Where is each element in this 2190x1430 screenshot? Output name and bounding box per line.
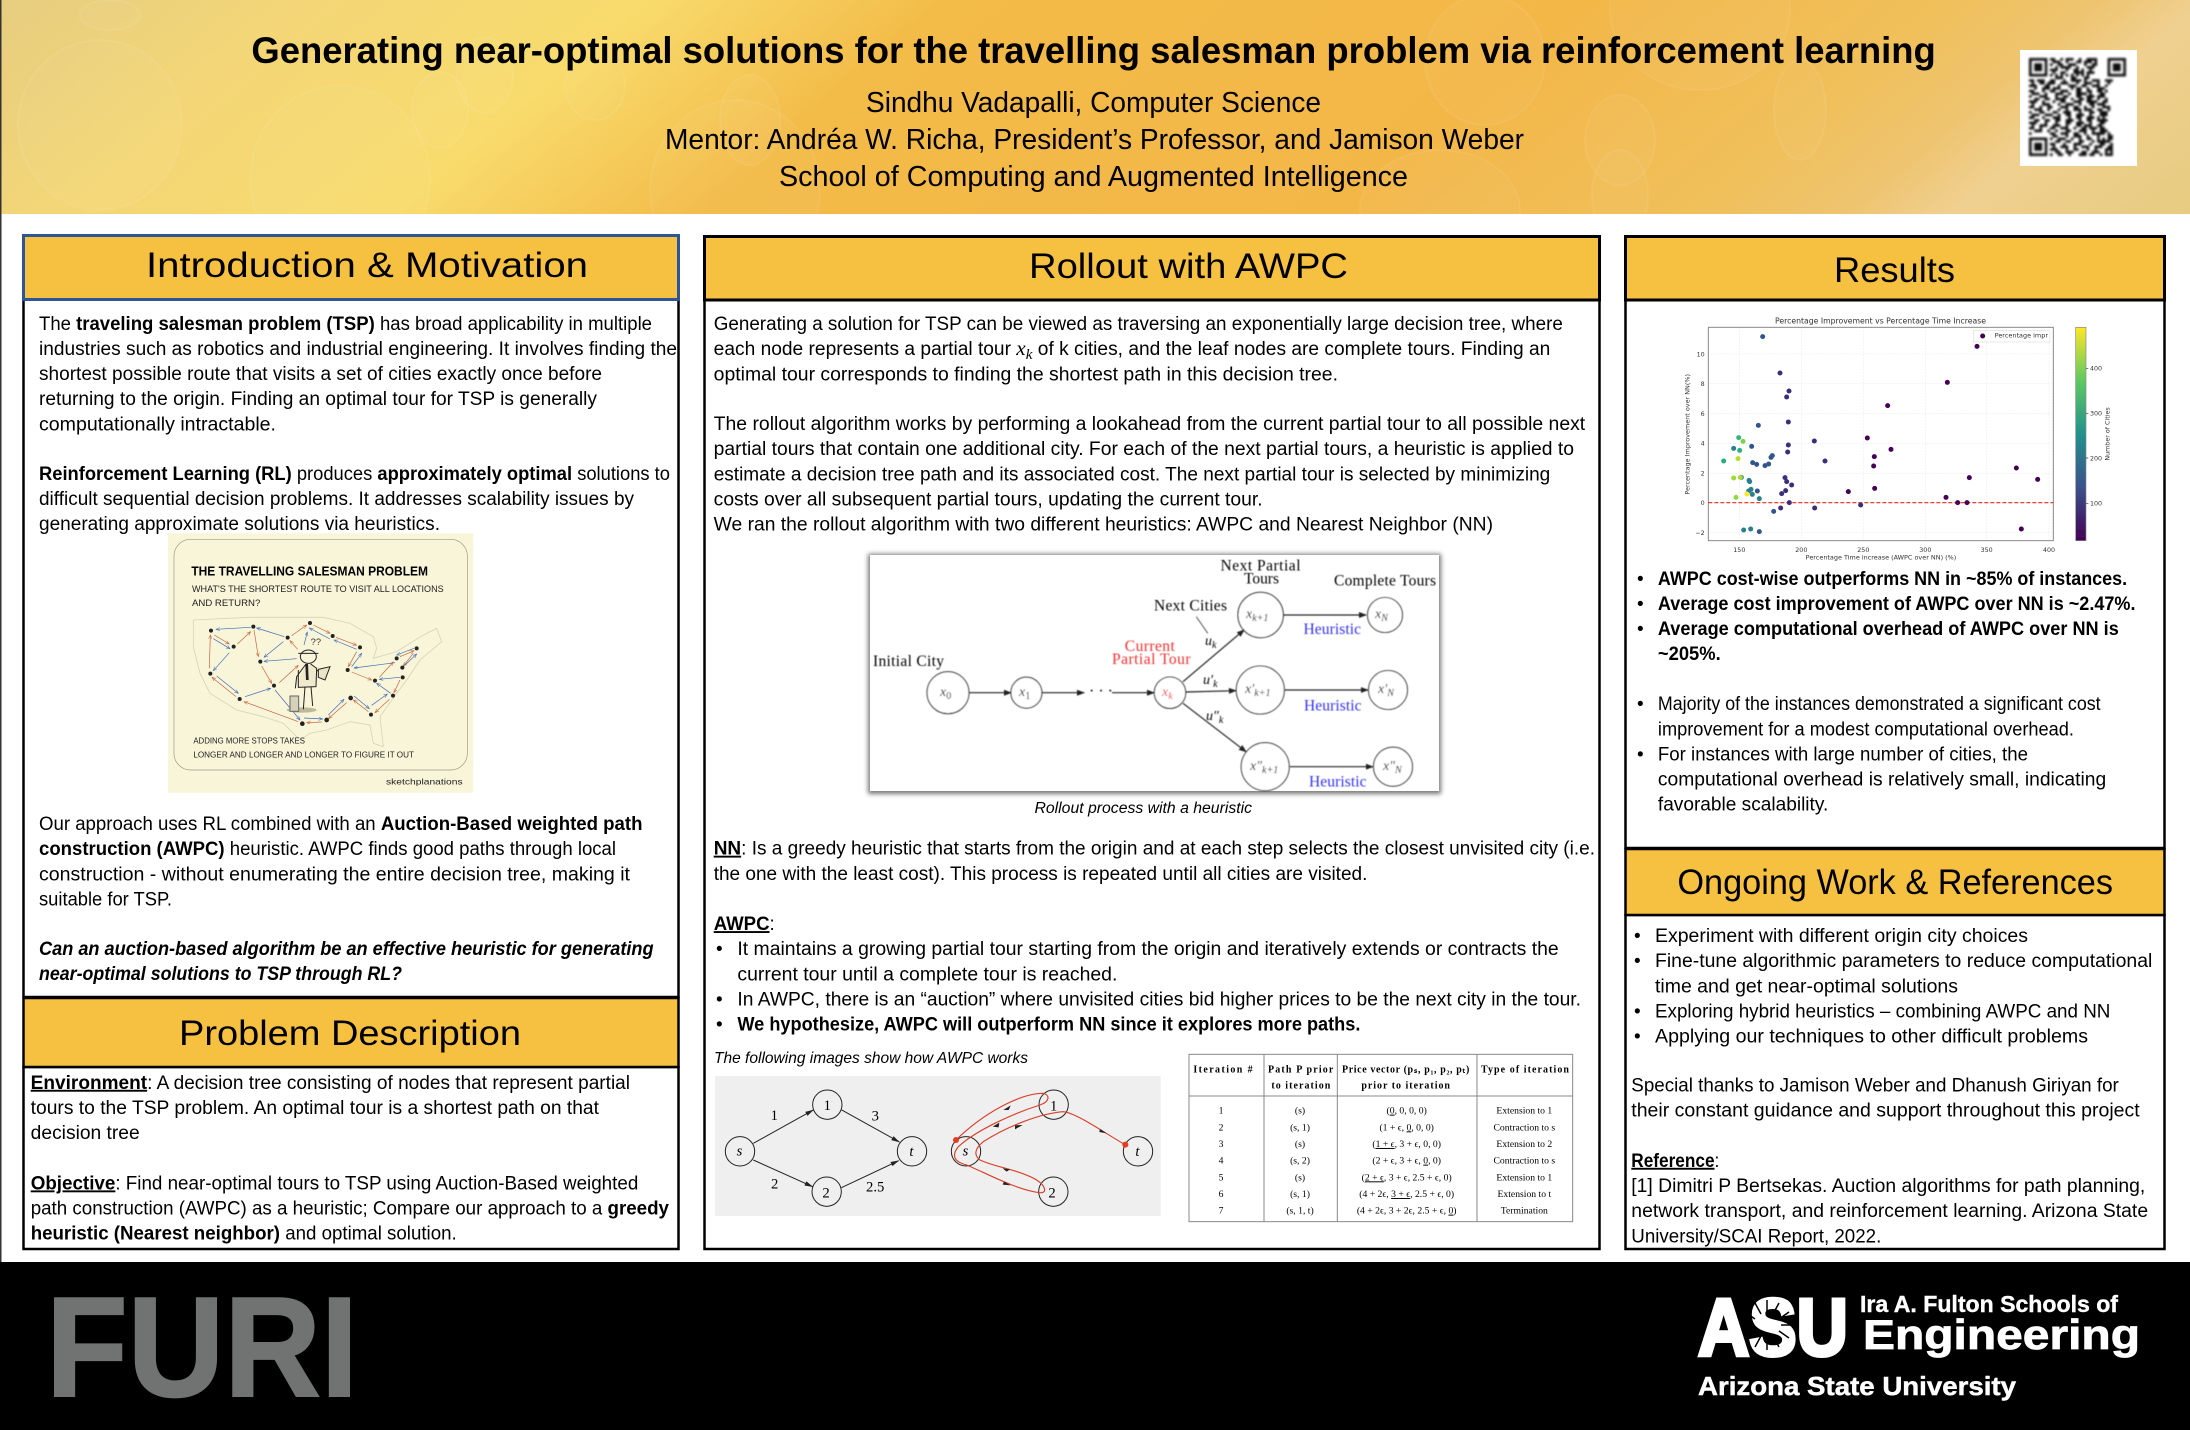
panel: ongoing work and references: [1626, 849, 2164, 1249]
text block: key results: •: [1637, 619, 1644, 640]
diagram: rollout process: x: [1375, 607, 1381, 622]
table: AWPC iterations: 4: [1219, 1156, 1224, 1167]
text block: ongoing work list: time and get near-optimal solutions: [1655, 976, 1958, 997]
text block: AWPC description: •: [716, 990, 723, 1010]
logo: ASU Fulton Engineering: Arizona State University: [1698, 1371, 2017, 1401]
logo: ASU Fulton Engineering: Engineering: [1863, 1311, 2140, 1358]
footer bar: [0, 1262, 2190, 1430]
text block: AWPC description: AWPC:: [714, 914, 775, 935]
diagram: AWPC graph example: 2.5: [866, 1180, 884, 1196]
table: AWPC iterations: 3: [1219, 1139, 1224, 1150]
scatter chart: percentage improvement vs time increase: 400: [2090, 366, 2102, 373]
text block: research question: near-optimal solutions to TSP through RL?: [39, 964, 402, 985]
diagram: rollout process: x″: [1250, 759, 1262, 774]
school: School of Computing and Augmented Intelligence: [779, 161, 1408, 193]
table: AWPC iterations: Type of iteration: [1481, 1065, 1569, 1076]
heading: Rollout with AWPC: Rollout with AWPC: [1029, 247, 1348, 286]
text block: research question: [39, 939, 654, 985]
text block: acknowledgements: [1631, 1075, 2140, 1122]
table: AWPC iterations: (s, 2): [1290, 1156, 1310, 1167]
text block: our approach: suitable for TSP.: [39, 890, 172, 910]
text block: key results: AWPC cost-wise outperforms NN in ~85% of instances.: [1658, 569, 2127, 590]
text block: TSP introduction: industries such as robotics and industrial engineering. It involves finding the: [39, 339, 677, 360]
diagram: rollout process: Initial City: [873, 653, 944, 670]
table: AWPC iterations: (s, 1): [1290, 1189, 1310, 1200]
text block: TSP introduction: [39, 314, 677, 436]
diagram: rollout process: Partial Tour: [1112, 651, 1191, 668]
table: AWPC iterations: (1 + ϵ, 3 + ϵ, 0, 0): [1372, 1139, 1441, 1150]
text block: reinforcement learning: generating approximate solutions via heuristics.: [39, 514, 440, 535]
table: AWPC iterations: (2 + ϵ, 3 + ϵ, 0, 0): [1372, 1156, 1441, 1167]
text block: nearest neighbor: NN: Is a greedy heuristic that starts from the origin and at each step selects the closest unvisited city (i.e.: [714, 839, 1595, 860]
table: AWPC iterations: Termination: [1501, 1206, 1548, 1217]
table: AWPC iterations: (1 + ϵ, 0, 0, 0): [1379, 1122, 1434, 1133]
illustration: the travelling salesman problem sketch: AND RETURN?: [192, 598, 260, 608]
text block: objective: [31, 1173, 669, 1245]
diagram: AWPC graph example: 3: [872, 1109, 879, 1125]
text block: TSP introduction: returning to the origin. Finding an optimal tour for TSP is generally: [39, 389, 598, 410]
scatter chart: percentage improvement vs time increase: 4: [1701, 441, 1705, 448]
diagram: rollout process: x′: [1245, 682, 1254, 697]
text block: our approach: construction - without enumerating the entire decision tree, making it: [39, 864, 631, 885]
text block: rollout algorithm: partial tours that contain one additional city. For each of the next partial tours, a heuristic is applied to: [714, 439, 1574, 460]
logo: ASU Fulton Engineering: Ira A. Fulton Schools of: [1860, 1291, 2118, 1317]
scatter chart: percentage improvement vs time increase: Number of Cities: [2105, 407, 2112, 461]
heading: Introduction & Motivation: Introduction & Motivation: [146, 246, 588, 285]
text block: ongoing work list: Fine-tune algorithmic parameters to reduce computational: [1655, 951, 2152, 972]
heading: Ongoing Work & References: Ongoing Work & References: [1677, 863, 2113, 902]
text block: rollout algorithm: costs over all subsequent partial tours, updating the current tour.: [714, 490, 1263, 510]
diagram: rollout process: Next Partial: [1220, 558, 1300, 575]
table: AWPC iterations: Path P prior: [1268, 1065, 1334, 1076]
text block: AWPC description: •: [716, 1015, 723, 1036]
table: AWPC iterations: Contraction to s: [1493, 1122, 1555, 1133]
diagram: AWPC graph example: s: [963, 1143, 969, 1159]
text block: objective: heuristic (Nearest neighbor) and optimal solution.: [31, 1224, 457, 1245]
text block: reinforcement learning: Reinforcement Learning (RL) produces approximately optimal solutions to: [39, 464, 670, 485]
text block: our approach: [39, 814, 642, 910]
diagram: rollout process: k: [1219, 715, 1224, 726]
scatter chart: percentage improvement vs time increase: 200: [2090, 455, 2102, 462]
diagram: rollout process: k+1: [1252, 613, 1268, 624]
diagram: rollout process: x″: [1383, 759, 1395, 774]
scatter chart: percentage improvement vs time increase: 0: [1701, 500, 1705, 507]
table: AWPC iterations: (s): [1295, 1139, 1305, 1150]
scatter chart: percentage improvement vs time increase: [1684, 316, 2112, 562]
text block: objective: Objective: Find near-optimal tours to TSP using Auction-Based weighted: [31, 1173, 638, 1194]
table: AWPC iterations: (s, 1): [1290, 1122, 1310, 1133]
logo: ASU Fulton Engineering: [1698, 1283, 2140, 1401]
panel: results: [1626, 236, 2164, 848]
diagram: AWPC graph example: [715, 1076, 1161, 1216]
diagram: rollout process: x: [1162, 685, 1168, 700]
table: AWPC iterations: [1189, 1054, 1573, 1222]
scatter chart: percentage improvement vs time increase: 200: [1795, 547, 1807, 554]
scatter chart: percentage improvement vs time increase: Percentage Improvement over NN(%): [1684, 374, 1691, 495]
text block: reference: Reference:: [1631, 1151, 1719, 1172]
scatter chart: percentage improvement vs time increase: Percentage Time increase (AWPC over NN) (%): [1806, 555, 1956, 562]
diagram: rollout process: Tours: [1244, 570, 1279, 588]
table: AWPC iterations: Extension to 1: [1496, 1172, 1552, 1183]
icon: QR code: [2020, 50, 2137, 166]
text block: ongoing work list: [1634, 926, 2152, 1048]
text block: AWPC description: In AWPC, there is an “auction” where unvisited cities bid higher prices to be the next city in the tour.: [737, 990, 1581, 1010]
caption: AWPC images: The following images show how AWPC works: [714, 1050, 1028, 1067]
table: AWPC iterations: 6: [1219, 1189, 1224, 1200]
text block: ongoing work list: •: [1634, 1026, 1641, 1047]
panel: introduction and motivation: [24, 236, 678, 997]
text block: observations: computational overhead is relatively small, indicating: [1658, 770, 2106, 791]
text block: AWPC description: current tour until a complete tour is reached.: [737, 964, 1117, 985]
text block: reinforcement learning: difficult sequential decision problems. It addresses scalability issues by: [39, 489, 634, 510]
text block: ongoing work list: Experiment with different origin city choices: [1655, 926, 2028, 947]
diagram: AWPC graph example: 2: [822, 1185, 830, 1201]
table: AWPC iterations: Extension to 2: [1496, 1139, 1552, 1150]
table: AWPC iterations: to iteration: [1271, 1080, 1331, 1091]
table: AWPC iterations: Contraction to s: [1493, 1156, 1555, 1167]
text block: key results: Average cost improvement of AWPC over NN is ~2.47%.: [1658, 594, 2136, 615]
diagram: rollout process: N: [1394, 765, 1403, 776]
text block: key results: ~205%.: [1658, 644, 1721, 665]
diagram: rollout process: Complete Tours: [1334, 573, 1436, 590]
text block: reference: [1631, 1151, 2148, 1247]
text block: observations: Majority of the instances demonstrated a significant cost: [1658, 694, 2101, 715]
text block: decision tree: Generating a solution for TSP can be viewed as traversing an exponentially large decision tree, where: [714, 314, 1563, 335]
diagram: rollout process: · · ·: [1089, 683, 1113, 700]
scatter chart: percentage improvement vs time increase: 100: [2090, 501, 2102, 508]
text block: nearest neighbor: the one with the least cost). This process is repeated until all cities are visited.: [714, 864, 1367, 885]
table: AWPC iterations: (0, 0, 0, 0): [1387, 1106, 1427, 1117]
text block: ongoing work list: •: [1634, 926, 1641, 947]
diagram: rollout process: k: [1213, 679, 1218, 690]
text block: ongoing work list: Applying our techniques to other difficult problems: [1655, 1026, 2088, 1047]
text block: reference: University/SCAI Report, 2022.: [1631, 1226, 1881, 1247]
illustration: the travelling salesman problem sketch: WHAT'S THE SHORTEST ROUTE TO VISIT ALL LOCATIONS: [192, 584, 444, 594]
table: AWPC iterations: Iteration #: [1193, 1065, 1253, 1076]
scatter chart: percentage improvement vs time increase: 10: [1697, 351, 1705, 358]
text block: rollout algorithm: estimate a decision tree path and its associated cost. The next partial tour is selected by minimizing: [714, 464, 1550, 485]
text block: environment: decision tree: [31, 1123, 140, 1144]
table: AWPC iterations: Extension to t: [1498, 1189, 1551, 1200]
diagram: rollout process: Current: [1125, 638, 1175, 655]
scatter chart: percentage improvement vs time increase: 8: [1701, 381, 1705, 388]
text block: observations: •: [1637, 744, 1644, 765]
table: AWPC iterations: Extension to 1: [1496, 1106, 1552, 1117]
text block: rollout algorithm: [714, 414, 1586, 536]
illustration: the travelling salesman problem sketch: ADDING MORE STOPS TAKES: [193, 736, 305, 745]
table: AWPC iterations: (s): [1295, 1172, 1305, 1183]
illustration: the travelling salesman problem sketch: [168, 533, 473, 793]
text block: decision tree: [714, 314, 1563, 385]
text block: reference: network transport, and reinforcement learning. Arizona State: [1631, 1201, 2148, 1222]
scatter chart: percentage improvement vs time increase: 2: [1701, 471, 1705, 478]
scatter chart: percentage improvement vs time increase: 150: [1733, 547, 1745, 554]
table: AWPC iterations: (2 + ϵ, 3 + ϵ, 2.5 + ϵ, 0): [1362, 1172, 1452, 1183]
scatter chart: percentage improvement vs time increase: Percentage Improvement vs Percentage Time Increase: [1775, 316, 1986, 325]
table: AWPC iterations: 7: [1219, 1206, 1224, 1217]
text block: observations: [1637, 694, 2106, 816]
diagram: rollout process: k+1: [1262, 765, 1278, 776]
text block: decision tree: each node represents a partial tour x: [714, 336, 1026, 360]
diagram: rollout process: 0: [946, 691, 951, 702]
diagram: rollout process: x: [940, 685, 946, 700]
table: AWPC iterations: 2: [1219, 1122, 1224, 1133]
text block: environment: Environment: A decision tree consisting of nodes that represent partial: [31, 1073, 630, 1094]
diagram: AWPC graph example: 1: [824, 1098, 831, 1114]
diagram: AWPC graph example: s: [737, 1143, 743, 1159]
diagram: rollout process: N: [1386, 688, 1395, 699]
diagram: AWPC graph example: 1: [771, 1108, 778, 1124]
text block: decision tree: of k cities, and the leaf nodes are complete tours. Finding an: [1032, 339, 1550, 360]
text block: environment: [31, 1073, 630, 1144]
diagram: rollout process: u′: [1203, 673, 1213, 688]
author: Sindhu Vadapalli, Computer Science: [866, 87, 1321, 119]
text block: acknowledgements: their constant guidance and support throughout this project: [1631, 1101, 2140, 1122]
scatter chart: percentage improvement vs time increase: 6: [1701, 411, 1705, 418]
illustration: the travelling salesman problem sketch: LONGER AND LONGER AND LONGER TO FIGURE IT OUT: [193, 750, 414, 759]
illustration: the travelling salesman problem sketch: THE TRAVELLING SALESMAN PROBLEM: [191, 564, 428, 578]
text block: ongoing work list: •: [1634, 951, 1641, 972]
text block: objective: path construction (AWPC) as a heuristic; Compare our approach to a greedy: [31, 1198, 669, 1220]
diagram: rollout process: N: [1380, 613, 1389, 624]
text block: AWPC description: •: [716, 939, 723, 960]
table: AWPC iterations: 5: [1219, 1172, 1224, 1183]
diagram: rollout process: u″: [1206, 709, 1219, 724]
diagram: rollout process: k: [1212, 640, 1217, 651]
diagram: AWPC graph example: 2: [1048, 1185, 1056, 1201]
logo: FURI: FURI: [46, 1268, 358, 1427]
text block: our approach: construction (AWPC) heuristic. AWPC finds good paths through local: [39, 839, 616, 860]
text block: AWPC description: [714, 914, 1581, 1036]
table: AWPC iterations: (4 + 2ϵ, 3 + 2ϵ, 2.5 + ϵ, 0): [1357, 1206, 1457, 1217]
text block: rollout algorithm: We ran the rollout algorithm with two different heuristics: AWPC and Nearest Neighbor (NN): [714, 515, 1493, 536]
text block: observations: For instances with large number of cities, the: [1658, 744, 2028, 765]
text block: reference: [1] Dimitri P Bertsekas. Auction algorithms for path planning,: [1631, 1176, 2145, 1197]
text block: research question: Can an auction-based algorithm be an effective heuristic for generating: [39, 939, 654, 960]
caption: rollout process: Rollout process with a heuristic: [1034, 800, 1252, 817]
text block: decision tree: k: [1026, 347, 1033, 363]
diagram: rollout process: [868, 554, 1441, 794]
illustration: the travelling salesman problem sketch: sketchplanations: [386, 776, 463, 786]
text block: TSP introduction: computationally intractable.: [39, 414, 276, 436]
heading: Problem Description: Problem Description: [179, 1014, 521, 1053]
scatter chart: percentage improvement vs time increase: Percentage impr: [1995, 333, 2048, 340]
diagram: rollout process: k: [1168, 691, 1173, 702]
diagram: rollout process: Next Cities: [1154, 598, 1227, 615]
scatter chart: percentage improvement vs time increase: −2: [1695, 530, 1705, 537]
diagram: rollout process: 1: [1025, 691, 1030, 702]
table: AWPC iterations: Price vector (pₛ, p₁, p₂, pₜ): [1342, 1065, 1469, 1076]
text block: key results: Average computational overhead of AWPC over NN is: [1658, 619, 2119, 640]
table: AWPC iterations: (s, 1, t): [1286, 1206, 1314, 1217]
diagram: AWPC graph example: t: [909, 1144, 914, 1160]
text block: reinforcement learning: [39, 464, 670, 535]
diagram: AWPC graph example: 1: [1050, 1099, 1057, 1115]
logo: ASU Fulton Engineering: ASU: [1698, 1283, 1848, 1373]
scatter chart: percentage improvement vs time increase: 350: [1981, 547, 1993, 554]
text block: observations: •: [1637, 694, 1644, 715]
diagram: AWPC graph example: t: [1135, 1144, 1140, 1160]
scatter chart: percentage improvement vs time increase: 300: [2090, 411, 2102, 418]
text block: decision tree: optimal tour corresponds to finding the shortest path in this decision tree.: [714, 364, 1338, 385]
diagram: rollout process: k+1: [1254, 688, 1270, 699]
text block: observations: favorable scalability.: [1658, 795, 1828, 816]
text block: key results: [1637, 569, 2136, 665]
heading: Results: Results: [1834, 251, 1955, 290]
table: AWPC iterations: prior to iteration: [1361, 1080, 1450, 1091]
mentor: Mentor: Andréa W. Richa, President’s Professor, and Jamison Weber: [665, 124, 1524, 156]
text block: acknowledgements: Special thanks to Jamison Weber and Dhanush Giriyan for: [1631, 1075, 2119, 1096]
diagram: rollout process: u: [1205, 634, 1212, 649]
text block: environment: tours to the TSP problem. An optimal tour is a shortest path on that: [31, 1098, 600, 1119]
diagram: rollout process: x: [1246, 607, 1252, 622]
table: AWPC iterations: (s): [1295, 1106, 1305, 1117]
text block: AWPC description: It maintains a growing partial tour starting from the origin and iteratively extends or contracts the: [737, 939, 1559, 960]
diagram: rollout process: Heuristic: [1309, 774, 1367, 791]
text block: ongoing work list: Exploring hybrid heuristics – combining AWPC and NN: [1655, 1001, 2110, 1022]
text block: TSP introduction: The traveling salesman problem (TSP) has broad applicability in multiple: [39, 314, 652, 335]
diagram: rollout process: x: [1019, 685, 1025, 700]
diagram: rollout process: Heuristic: [1304, 698, 1362, 715]
illustration: the travelling salesman problem sketch: ??: [311, 637, 321, 647]
text block: our approach: Our approach uses RL combined with an Auction-Based weighted path: [39, 814, 642, 835]
text block: rollout algorithm: The rollout algorithm works by performing a lookahead from the current partial tour to all possible next: [714, 414, 1586, 435]
scatter chart: percentage improvement vs time increase: 250: [1857, 547, 1869, 554]
text block: observations: improvement for a modest computational overhead.: [1658, 719, 2074, 740]
header banner: [0, 0, 2190, 280]
diagram: AWPC graph example: 2: [771, 1176, 778, 1192]
scatter chart: percentage improvement vs time increase: 400: [2043, 547, 2055, 554]
text block: nearest neighbor: [714, 839, 1595, 885]
text block: key results: •: [1637, 569, 1644, 590]
title: Generating near-optimal solutions for the travelling salesman problem via reinforcement learning: [251, 30, 1936, 71]
text block: AWPC description: We hypothesize, AWPC will outperform NN since it explores more paths.: [737, 1015, 1360, 1036]
panel: problem description: [24, 998, 678, 1249]
text block: ongoing work list: •: [1634, 1001, 1641, 1022]
left page edge line: [0, 0, 2, 1262]
text block: TSP introduction: shortest possible route that visits a set of cities exactly once before: [39, 364, 602, 385]
diagram: rollout process: Heuristic: [1304, 621, 1361, 638]
text block: key results: •: [1637, 594, 1644, 615]
table: AWPC iterations: (4 + 2ϵ, 3 + ϵ, 2.5 + ϵ, 0): [1359, 1189, 1454, 1200]
panel: rollout with AWPC: [704, 236, 1600, 1249]
table: AWPC iterations: 1: [1219, 1106, 1224, 1117]
scatter chart: percentage improvement vs time increase: 300: [1919, 547, 1931, 554]
diagram: rollout process: x′: [1378, 682, 1387, 697]
